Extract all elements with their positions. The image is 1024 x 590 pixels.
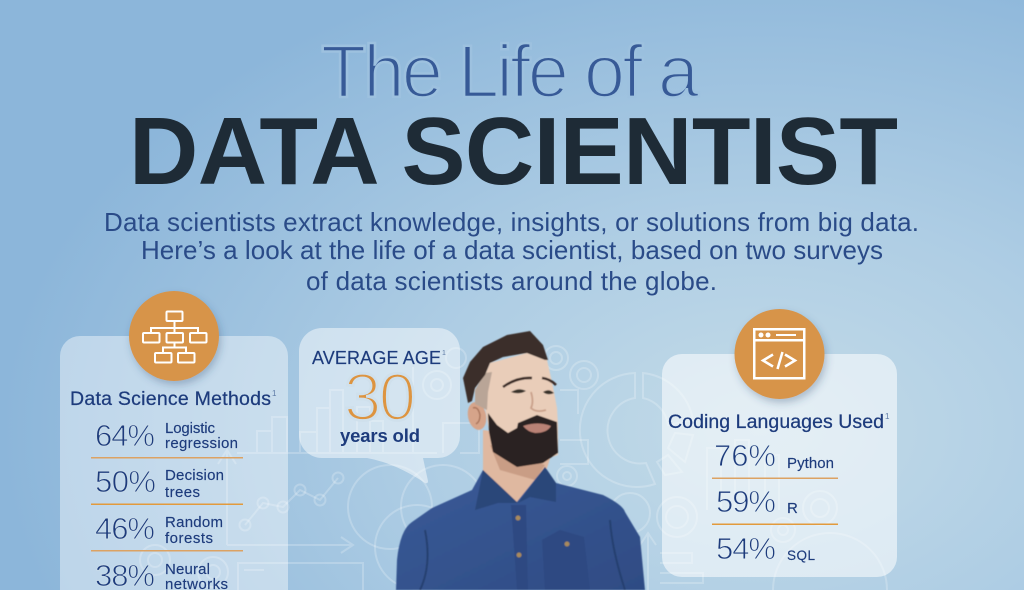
years old label: years old (340, 425, 420, 446)
panel heading: 1 (272, 389, 277, 398)
title: Data Scientist: DATA SCIENTIST (129, 98, 898, 205)
speech bubble: average age (299, 328, 460, 483)
stat: 46% random forests (95, 511, 223, 547)
stat: 38% neural networks (95, 558, 228, 590)
stat: 64% logistic regression (95, 418, 238, 453)
panel heading: Data Science Methods (70, 388, 271, 410)
ear (465, 400, 489, 432)
stat: 54% SQL: SQL (787, 548, 815, 563)
average age label: AVERAGE AGE (312, 348, 441, 368)
stat: 76% Python (714, 438, 834, 473)
title: The Life of a: The Life of a (321, 30, 700, 113)
beard and moustache (488, 413, 558, 467)
intro paragraph: Here’s a look at the life of a data scientist, based on two surveys (141, 235, 883, 265)
stat: 64% logistic regression: 64% (95, 418, 155, 453)
background data-science line icons (140, 346, 887, 590)
stat: 76% Python: Python (787, 455, 834, 472)
photo: data scientist with crossed arms (396, 331, 645, 590)
lips (523, 424, 551, 433)
icon: code window badge (734, 309, 824, 399)
intro paragraph (104, 207, 919, 296)
neck (483, 430, 556, 505)
stat: 46% random forests: forests (165, 530, 213, 547)
stat: 50% decision trees: 50% (95, 464, 156, 499)
panel heading: 1 (885, 412, 890, 421)
face (485, 353, 558, 465)
stat: 64% logistic regression: Logistic (165, 420, 216, 437)
stat: 46% random forests: Random (165, 514, 223, 531)
stat: 59% R: 59% (716, 484, 776, 519)
stat: 54% SQL: 54% (716, 531, 776, 566)
shirt (396, 467, 645, 590)
average age value: 30 (344, 360, 416, 435)
stat: 50% decision trees (95, 464, 224, 501)
nose shadow (531, 392, 546, 411)
hair (463, 331, 548, 403)
stat: 54% SQL (716, 531, 815, 566)
icon: flowchart badge (129, 291, 219, 381)
temple fade (475, 372, 492, 410)
stat: 50% decision trees: Decision (165, 467, 224, 484)
average age label: 1 (442, 350, 446, 357)
intro paragraph: of data scientists around the globe. (306, 266, 717, 296)
stat: 76% Python: 76% (714, 438, 776, 473)
stat: 64% logistic regression: regression (165, 435, 238, 452)
eyebrows and eyes (503, 378, 556, 387)
panel heading: Coding Languages Used (668, 411, 884, 433)
stat: 38% neural networks: Neural (165, 561, 210, 578)
intro paragraph: Data scientists extract knowledge, insights, or solutions from big data. (104, 207, 919, 237)
stat: 59% R: R (787, 500, 798, 517)
stat: 46% random forests: 46% (95, 511, 155, 546)
panel: Coding Languages Used (662, 354, 897, 577)
panel: Data Science Methods (60, 336, 288, 590)
stat: 50% decision trees: trees (165, 484, 200, 501)
